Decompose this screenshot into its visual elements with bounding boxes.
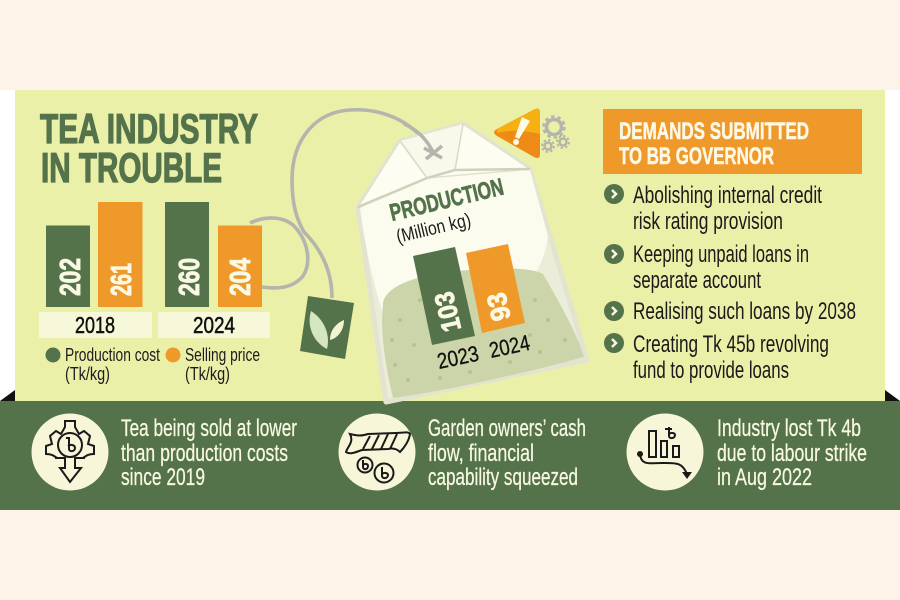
tea bag strings [250, 110, 433, 298]
panel: demands heading [603, 109, 862, 174]
tea bag [358, 124, 587, 402]
text: cash flow squeezed: Garden owners’ cash [428, 415, 586, 442]
bag bar chart: 93 [481, 290, 517, 324]
panel: demands heading: DEMANDS SUBMITTED [619, 118, 809, 145]
bag bar chart [413, 244, 532, 374]
text: cash flow squeezed [428, 415, 586, 491]
demand 4: Creating Tk 45b revolving [633, 331, 829, 358]
bar chart: production cost vs selling price: 202 [55, 258, 87, 296]
chart legend: (Tk/kg) [65, 363, 110, 384]
bar chart: production cost vs selling price: 2018 [75, 312, 115, 338]
bar chart: production cost vs selling price: 2024 [193, 312, 235, 338]
bag folded top [358, 124, 530, 207]
bag bar chart: 2023 [435, 341, 481, 374]
string end and knot [404, 124, 442, 159]
title: TEA INDUSTRY [40, 105, 258, 152]
demand 4: fund to provide loans [633, 357, 789, 384]
item: labour strike loss [626, 414, 867, 491]
bag inner clear area [360, 170, 548, 320]
tea leaves in the bag [382, 268, 584, 398]
demand 2: separate account [633, 267, 761, 294]
title [40, 105, 258, 191]
icon: gear with taka and down arrow [32, 414, 108, 490]
demand 1: Abolishing internal credit [633, 182, 822, 209]
bar chart: production cost vs selling price: 204 [225, 258, 257, 296]
text: labour strike loss: in Aug 2022 [717, 464, 812, 491]
demand 1: risk rating provision [633, 208, 783, 235]
chart legend: Production cost [65, 344, 160, 365]
bar chart: production cost vs selling price: 260 [174, 258, 206, 296]
icon: wrung cloth with coins [338, 414, 416, 490]
icon: tea bag tag with leaves [300, 296, 354, 359]
chart legend: (Tk/kg) [185, 363, 230, 384]
text: sold below cost: than production costs [121, 440, 288, 467]
bag bar chart: 103 [429, 289, 467, 335]
icon: warning with gears [494, 108, 569, 158]
panel: bottom band [0, 401, 900, 510]
chart legend: Selling price [185, 344, 260, 365]
text: labour strike loss [717, 415, 867, 491]
bar chart: production cost vs selling price: 261 [106, 263, 138, 296]
panel: main background [15, 90, 885, 402]
bag bar chart: 2024 [487, 330, 532, 363]
bag heading: PRODUCTION [387, 174, 506, 227]
text: cash flow squeezed: capability squeezed [428, 464, 578, 491]
panel: demands heading: TO BB GOVERNOR [619, 143, 774, 170]
list: demands [604, 182, 856, 384]
bag heading [387, 174, 506, 248]
demand 2: Keeping unpaid loans in [633, 241, 809, 268]
text: cash flow squeezed: flow, financial [428, 440, 534, 467]
chart legend [46, 344, 260, 384]
icon: falling chart [626, 414, 704, 490]
text: sold below cost [121, 415, 297, 491]
bag heading: (Million kg) [394, 210, 473, 248]
item: cash flow squeezed [338, 414, 586, 491]
text: sold below cost: since 2019 [121, 464, 205, 491]
demand 2 [604, 241, 809, 294]
title: IN TROUBLE [41, 144, 222, 191]
bar chart: production cost vs selling price [39, 202, 270, 338]
demand 1 [604, 182, 822, 235]
demand 4 [604, 331, 829, 384]
item: sold below cost [32, 414, 297, 491]
text: sold below cost: Tea being sold at lower [121, 415, 297, 442]
